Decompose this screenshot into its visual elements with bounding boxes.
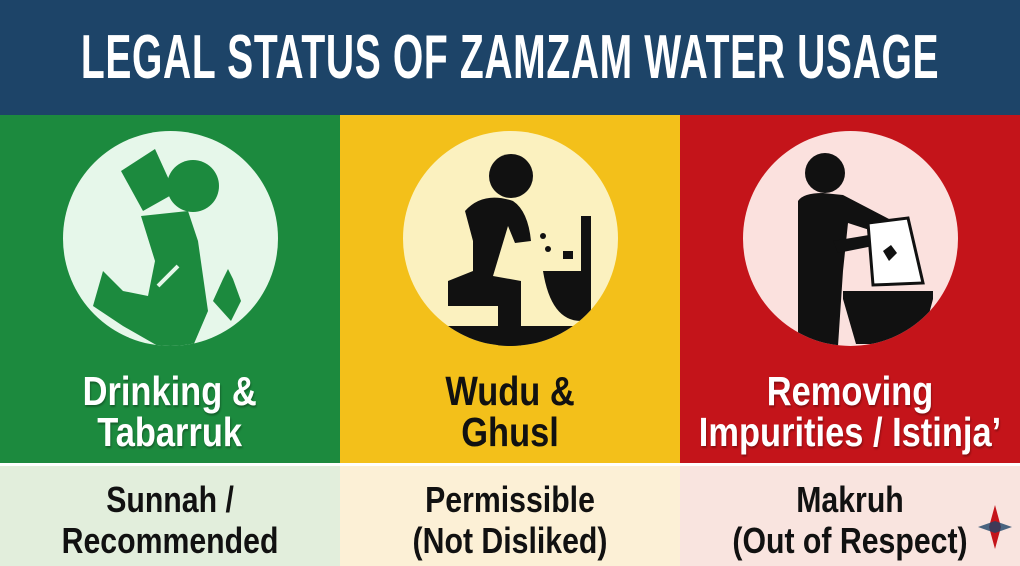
title — [0, 0, 1020, 115]
heading: wudu — [445, 368, 575, 455]
heading: drinking: Drinking & — [83, 368, 257, 414]
title: LEGAL STATUS OF ZAMZAM WATER USAGE — [81, 23, 939, 92]
status: makruh: (Out of Respect) — [732, 520, 968, 561]
status: permissible — [340, 466, 680, 566]
status: sunnah — [0, 466, 340, 566]
status: permissible: (Not Disliked) — [413, 520, 607, 561]
heading: wudu: Wudu & — [445, 368, 575, 414]
heading: drinking: Tabarruk — [98, 409, 242, 455]
heading: impurities: Removing — [767, 368, 933, 414]
panel: impurities — [680, 115, 1020, 463]
status: permissible: Permissible — [425, 479, 595, 520]
status: makruh: Makruh — [796, 479, 904, 520]
panel: wudu — [340, 115, 680, 463]
heading: impurities — [699, 368, 1001, 458]
icon: drinking person — [63, 131, 278, 346]
heading: impurities: Impurities / Istinja’ — [699, 409, 1001, 455]
heading: wudu: Ghusl — [461, 409, 559, 455]
status: sunnah: Recommended — [62, 520, 278, 561]
icon: wudu person — [403, 131, 618, 346]
icon: washing person — [743, 131, 958, 346]
heading: drinking — [83, 368, 257, 455]
status: makruh — [680, 466, 1020, 566]
icon: logo star — [978, 505, 1012, 549]
panel: drinking — [0, 115, 340, 463]
status: sunnah: Sunnah / — [106, 479, 234, 520]
